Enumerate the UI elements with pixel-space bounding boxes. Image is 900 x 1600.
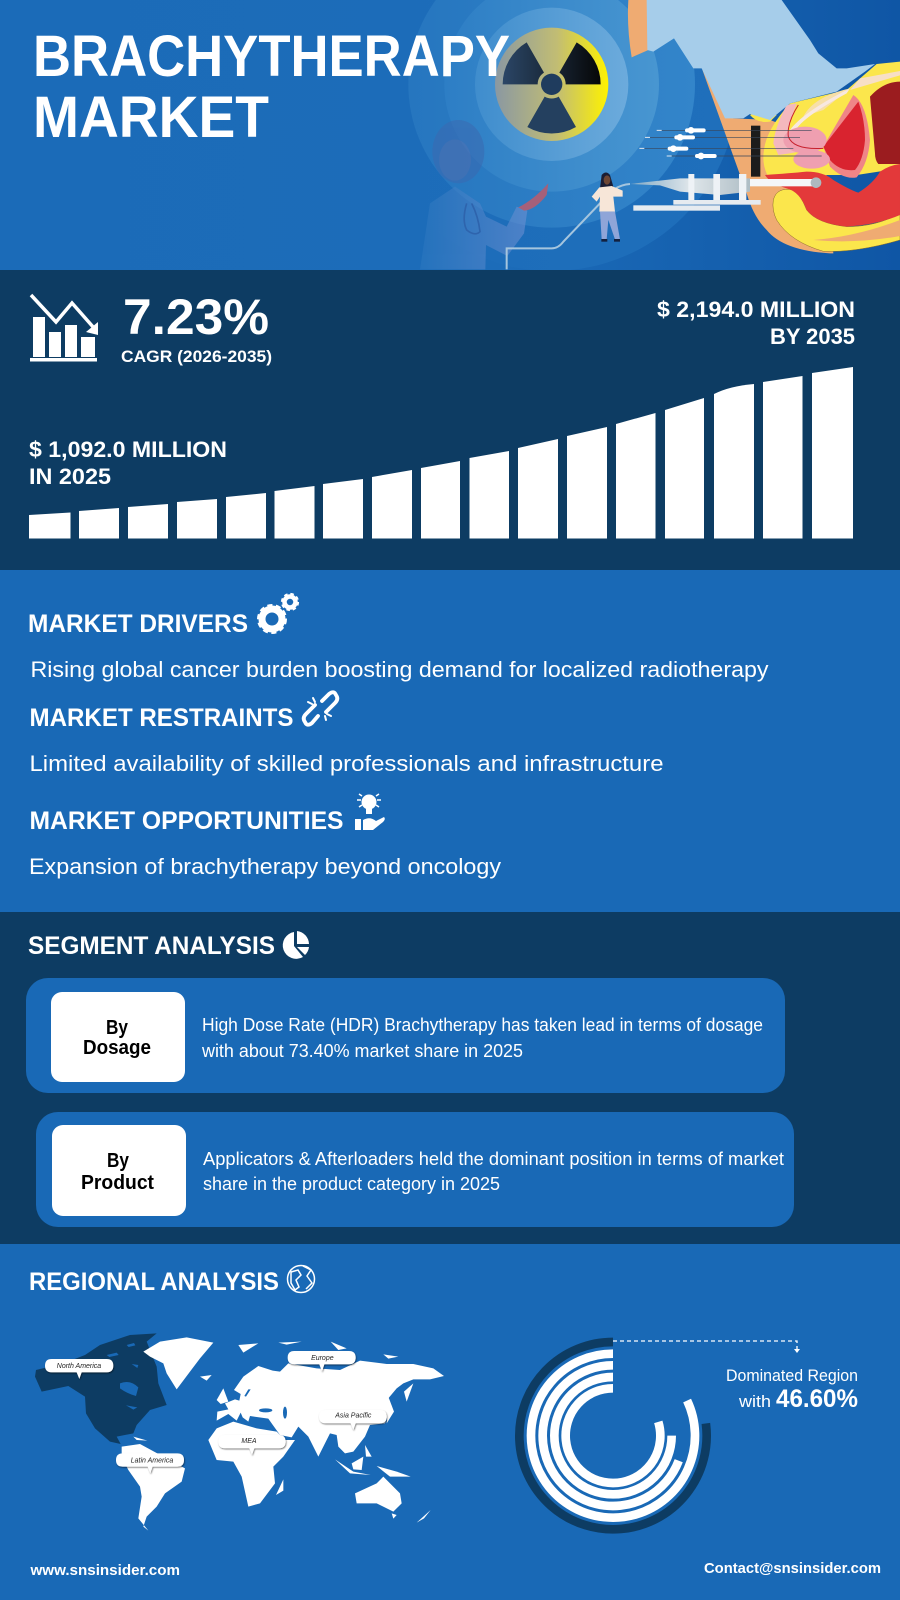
panel: market dynamics: [0, 570, 900, 912]
card: by dosage: By: [106, 1017, 129, 1039]
callout: dominated region: 46.60%: [776, 1385, 858, 1413]
label: 2025 value: IN 2025: [29, 464, 111, 489]
region: North America highlighted: [35, 1333, 167, 1444]
icon: pie chart: [283, 931, 309, 959]
card: by product: [36, 1112, 794, 1227]
callout: MEA: MEA: [241, 1438, 257, 1445]
figure: small clinician: [592, 172, 623, 242]
panel: regional analysis: [0, 1244, 900, 1600]
heading: regional analysis: REGIONAL ANALYSIS: [29, 1268, 279, 1296]
black shield bar: [751, 126, 760, 177]
heading: segment analysis: SEGMENT ANALYSIS: [28, 932, 275, 960]
callout: dominated region: [726, 1367, 858, 1413]
header banner: [0, 0, 900, 271]
card: by dosage: [26, 978, 785, 1093]
icon: globe: [288, 1266, 314, 1292]
doctor's raised hand: [518, 183, 548, 211]
callout: dominated region: Dominated Region: [726, 1367, 858, 1385]
card: by product: share in the product category in 2025: [203, 1174, 500, 1194]
cable: [507, 184, 630, 269]
callout: North America: North America: [57, 1363, 101, 1370]
title: BRACHYTHERAPY: [33, 24, 510, 89]
label: 2025 value: $ 1,092.0 MILLION: [29, 437, 227, 462]
Eurasia and northern islands: [217, 1342, 444, 1457]
text: driver: Rising global cancer burden boosting demand for localized radiotherapy: [30, 657, 769, 682]
callout: Asia Pacific: [319, 1410, 387, 1430]
panel: market size: [0, 270, 900, 570]
radial bar chart: [519, 1342, 707, 1529]
callout: Latin America: [116, 1453, 184, 1473]
label: 2025 value: [29, 437, 227, 489]
text: restraint: Limited availability of skilled professionals and infrastructure: [30, 751, 664, 776]
callout: Europe: [288, 1351, 356, 1372]
seed lines and capsules: [639, 127, 822, 159]
icon: hand with lightbulb: [355, 794, 385, 830]
gloved hand: [647, 0, 875, 120]
callout: MEA: [218, 1435, 286, 1455]
illustration: brachytherapy scene: [365, 0, 900, 271]
orange skin on wrist: [628, 0, 648, 57]
icon: broken chain: [304, 692, 337, 725]
label: 2035 value: $ 2,194.0 MILLION: [657, 297, 855, 322]
callout: Europe: Europe: [311, 1355, 334, 1362]
stat: CAGR: 7.23%: [123, 289, 269, 345]
icon: chart with falling arrow: [30, 295, 98, 362]
card: by dosage: with about 73.40% market share in 2025: [201, 1041, 523, 1061]
heading: market drivers: MARKET DRIVERS: [28, 610, 248, 638]
applicator device: [630, 174, 821, 211]
footer: website: www.snsinsider.com: [29, 1562, 180, 1579]
figure: faded doctor: [420, 120, 527, 269]
inland water: [244, 1389, 287, 1419]
heading: market restraints: MARKET RESTRAINTS: [30, 704, 294, 732]
anatomy cross-section: [703, 58, 900, 253]
world map: [35, 1333, 444, 1531]
heading: market opportunities: MARKET OPPORTUNITIES: [30, 807, 344, 835]
callouts: region labels: [45, 1351, 387, 1473]
icon: radiation symbol: [495, 28, 608, 141]
stat: CAGR: CAGR (2026-2035): [121, 347, 272, 366]
callout: dominated region: with: [738, 1393, 771, 1411]
card: by product: Product: [81, 1172, 154, 1194]
panel: segment analysis: [0, 912, 900, 1244]
concentric glow rings: [365, 0, 738, 271]
card: by dosage: Dosage: [83, 1037, 151, 1059]
bar chart: growth 2025 to 2035: [29, 367, 853, 538]
callout: Asia Pacific: Asia Pacific: [334, 1413, 372, 1420]
continents: [122, 1337, 444, 1531]
footer: contact: Contact@snsinsider.com: [704, 1560, 881, 1577]
label: 2035 value: [657, 297, 855, 349]
callout: Latin America: Latin America: [131, 1458, 173, 1465]
dashed leader arrow: [613, 1341, 800, 1353]
icon: gears: [258, 594, 298, 632]
title: [33, 24, 510, 150]
text: opportunity: Expansion of brachytherapy beyond oncology: [29, 854, 502, 879]
card: by dosage: High Dose Rate (HDR) Brachytherapy has taken lead in terms of dosage: [202, 1015, 763, 1035]
title: MARKET: [33, 85, 269, 150]
callout: North America: [45, 1359, 113, 1379]
stat: CAGR: [121, 289, 272, 366]
label: 2035 value: BY 2035: [770, 324, 855, 349]
card: by product: Applicators & Afterloaders held the dominant position in terms of market: [203, 1149, 784, 1169]
card: by product: By: [107, 1150, 130, 1172]
